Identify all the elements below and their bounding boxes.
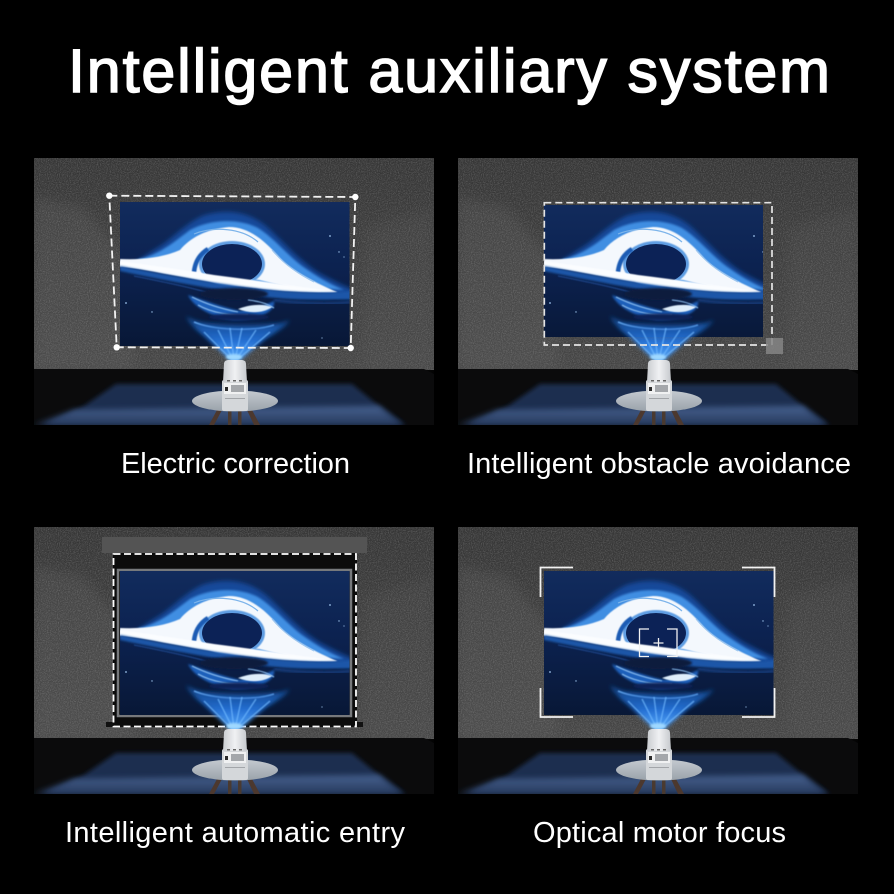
projector on table [616, 360, 702, 425]
centre focus reticle [640, 629, 677, 656]
keystone correction dashed frame [106, 192, 358, 351]
projected black hole image [538, 567, 778, 719]
projector on table [192, 360, 278, 425]
room background [458, 158, 858, 425]
room background [34, 158, 434, 425]
projected black hole image [114, 198, 354, 350]
caption: intelligent obstacle avoidance: Intelligent obstacle avoidance [467, 448, 851, 480]
panel: electric correction [34, 158, 434, 425]
projector on table [616, 729, 702, 794]
projected black hole image [114, 567, 354, 719]
caption: optical motor focus: Optical motor focus [533, 817, 786, 849]
corner focus brackets [540, 568, 774, 717]
projected black hole image [544, 205, 763, 337]
caption: intelligent automatic entry: Intelligent automatic entry [65, 817, 406, 849]
projector beam [619, 690, 703, 730]
black projection screen [113, 553, 357, 726]
projector beam [195, 321, 279, 360]
projector on table [192, 729, 278, 794]
title: Intelligent auxiliary system [68, 37, 830, 105]
projector beam [619, 321, 703, 360]
caption: electric correction: Electric correction [121, 448, 350, 480]
dashed screen alignment frame [114, 554, 356, 726]
panel: intelligent automatic entry [34, 527, 434, 794]
panel: intelligent obstacle avoidance [458, 158, 858, 425]
projector beam [195, 690, 279, 730]
roller screen housing [102, 537, 367, 553]
dashed projection boundary [544, 203, 772, 345]
room background [34, 527, 434, 794]
screen bottom bar [106, 722, 363, 727]
screen grey border [118, 570, 351, 716]
room background [458, 527, 858, 794]
panel: optical motor focus [458, 527, 858, 794]
obstacle square [766, 338, 783, 354]
